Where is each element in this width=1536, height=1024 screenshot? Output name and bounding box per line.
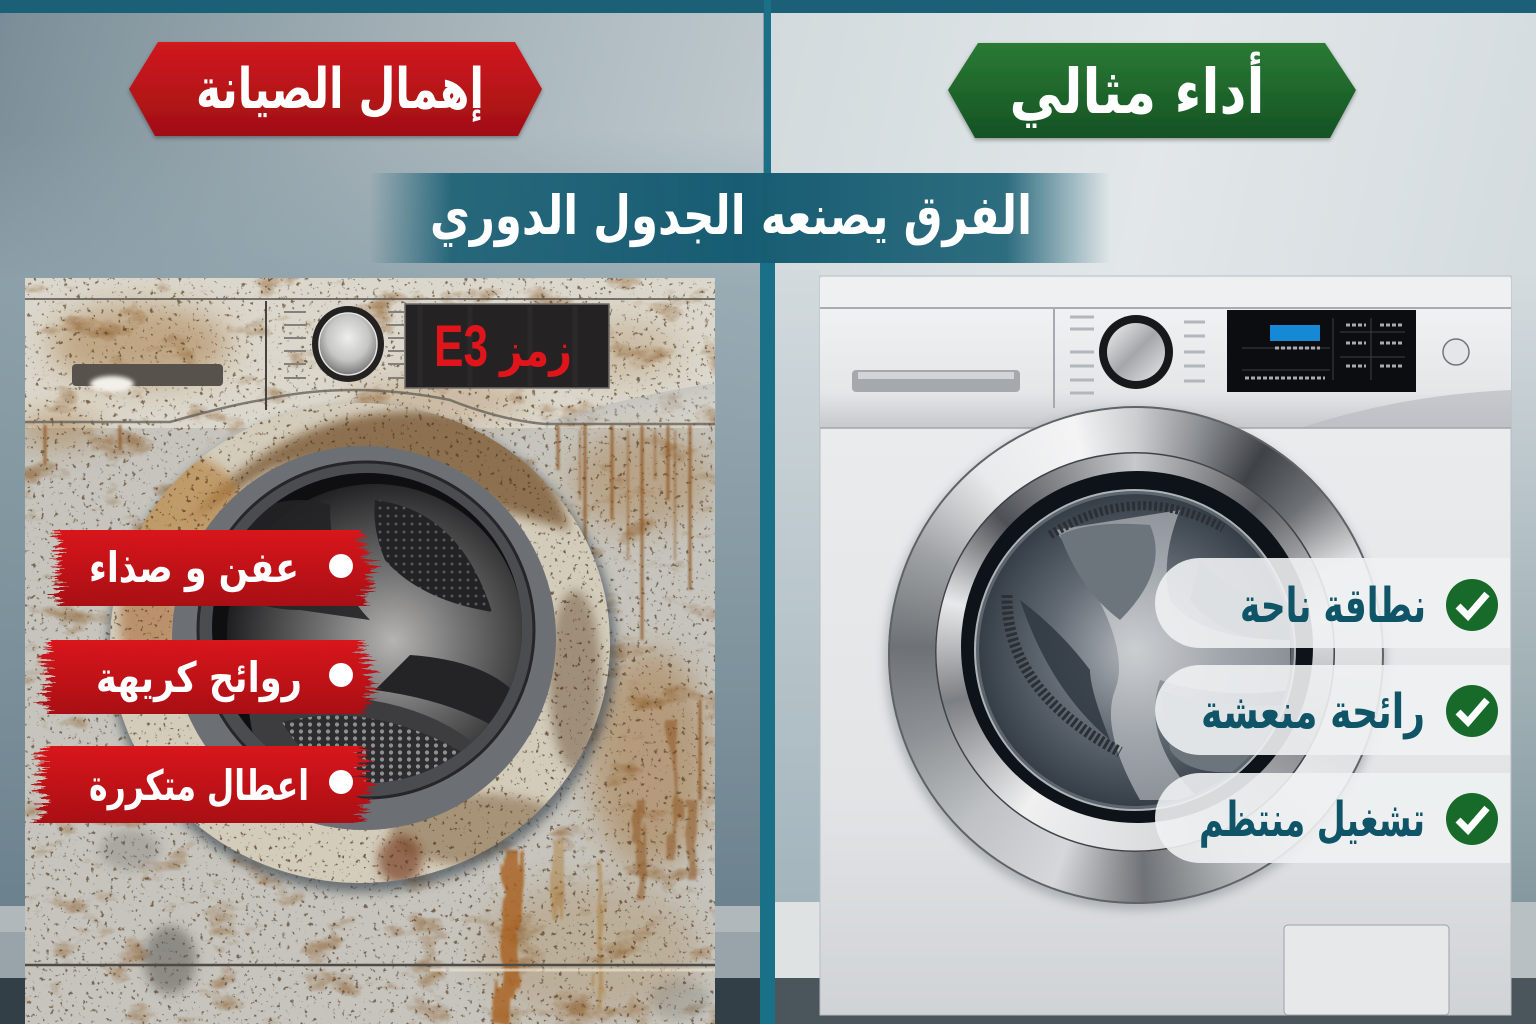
neglected washing machine (20, 278, 716, 1024)
rusty door (100, 400, 620, 892)
drum (979, 494, 1291, 806)
detergent drawer handle (72, 364, 223, 392)
symptom: bad odours (46, 640, 372, 714)
symptom: bad odours: روائح كريهة (96, 653, 302, 703)
benefit: cleanliness: نطاقة ناحة (1240, 578, 1426, 634)
central banner (370, 173, 1110, 263)
benefit: regular operation (1155, 773, 1510, 863)
icon: check (1446, 685, 1498, 737)
central banner: الفرق يصنعه الجدول الدوري (430, 184, 1032, 247)
benefit: fresh scent: رائحة منعشة (1201, 684, 1425, 740)
control panel edges (540, 383, 716, 424)
dial (1099, 315, 1173, 389)
error display (405, 304, 609, 388)
door gasket (172, 446, 556, 830)
drawer handle (852, 370, 1020, 392)
header: neglect (129, 42, 542, 136)
dial tick marks (1070, 317, 1205, 393)
background: left wall (0, 0, 763, 1024)
header: ideal performance: أداء مثالي (1010, 51, 1264, 128)
symptom: recurring faults (42, 746, 368, 823)
digital display (1227, 310, 1416, 392)
symptom: mould and rust (58, 530, 372, 606)
icon: check (1446, 579, 1498, 631)
power button (1443, 339, 1469, 365)
dial tick marks (284, 312, 404, 378)
perforated paddle (374, 500, 492, 612)
top teal bar (0, 0, 1536, 13)
background: right wall (770, 0, 1536, 1024)
inner chrome ring (935, 452, 1335, 852)
mould patches (100, 830, 710, 1020)
benefit: cleanliness (1155, 558, 1510, 648)
symptom labels (42, 530, 372, 823)
centre divider (760, 0, 775, 1024)
header: ideal performance (948, 43, 1356, 138)
drum (227, 484, 523, 790)
body (25, 278, 715, 1024)
body (820, 276, 1511, 1015)
header: neglect: إهمال الصيانة (196, 57, 484, 122)
clean washing machine (820, 276, 1511, 1015)
error display: E3 (434, 314, 488, 379)
benefit: regular operation: تشغيل منتظم (1199, 792, 1425, 848)
control panel (820, 309, 1511, 428)
symptom: recurring faults: اعطال متكررة (89, 761, 309, 811)
rust patches (20, 305, 710, 1020)
benefit labels (1155, 558, 1510, 863)
outer chrome ring (888, 406, 1384, 904)
rust streaks (45, 425, 700, 1024)
benefit: fresh scent (1155, 665, 1510, 755)
icon: check (1446, 793, 1498, 845)
symptom: mould and rust: عفن و صذاء (89, 543, 299, 593)
perforated lower drum (282, 715, 462, 786)
chrome door (885, 406, 1385, 910)
filter hatch (1284, 925, 1449, 1015)
dial (312, 306, 384, 382)
drum perforation arcs (1050, 506, 1223, 535)
error display: زمز (498, 323, 572, 377)
